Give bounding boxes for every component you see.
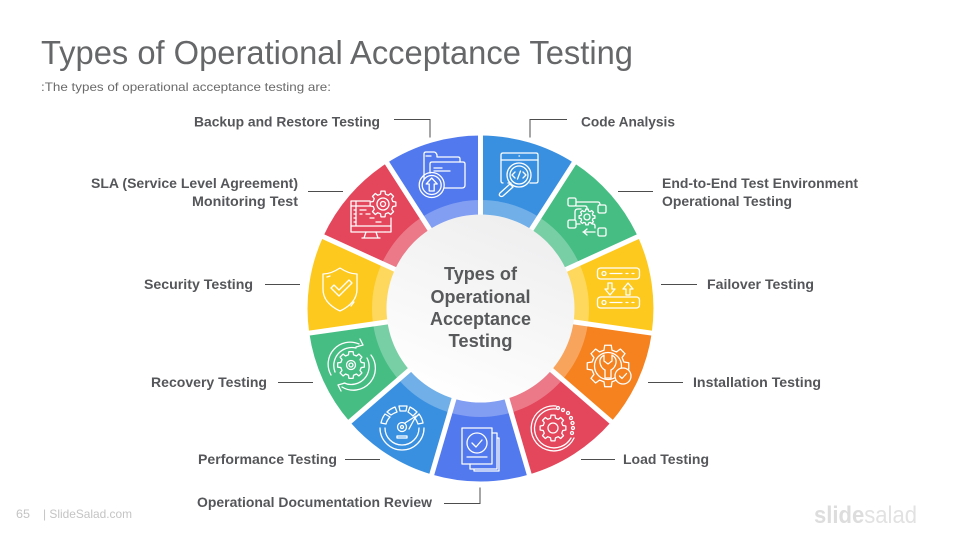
inner translucent ring	[372, 200, 589, 417]
icon: backup and restore	[419, 152, 465, 198]
label: load testing	[581, 451, 709, 467]
segment: end-to-end	[480, 163, 653, 359]
label: operational documentation review	[197, 488, 480, 510]
label: SLA monitoring test	[91, 175, 343, 209]
center disk	[386, 214, 574, 402]
label: security testing: Security Testing	[144, 276, 253, 292]
segment: failover	[480, 237, 677, 394]
page number: 65	[16, 507, 30, 521]
icon: end-to-end test environment	[568, 198, 606, 236]
segment: recovery	[289, 238, 480, 422]
donut chart	[289, 112, 677, 501]
segment: installation	[467, 308, 652, 426]
title: Types of Operational Acceptance Testing	[41, 34, 633, 71]
label: recovery testing: Recovery Testing	[151, 374, 267, 390]
icon: load	[531, 406, 574, 451]
label: backup and restore testing: Backup and Restore Testing	[194, 114, 380, 130]
label: installation testing: Installation Testing	[693, 374, 821, 390]
segment: load	[419, 308, 611, 492]
segment: performance	[342, 282, 480, 474]
center title: Types of	[444, 264, 518, 284]
label: SLA monitoring test: SLA (Service Level Agreement)	[91, 175, 298, 191]
icon: documentation review	[462, 428, 499, 471]
label: SLA monitoring test: Monitoring Test	[192, 193, 298, 209]
icon: security	[323, 268, 357, 311]
segment: documentation review	[391, 308, 529, 501]
label: operational documentation review: Operational Documentation Review	[197, 494, 432, 510]
label: end-to-end test environment: End-to-End Test Environment	[662, 175, 858, 191]
label: backup and restore testing	[194, 114, 430, 138]
icon: recovery	[328, 339, 375, 391]
segment: security	[296, 216, 480, 333]
center title: Acceptance	[430, 309, 531, 329]
icon: failover	[598, 268, 640, 308]
center title: Operational	[430, 287, 530, 307]
icon: installation	[587, 345, 631, 387]
label: end-to-end test environment	[618, 175, 858, 209]
icon: performance	[380, 406, 424, 450]
label: code analysis	[530, 114, 675, 138]
segment: backup and restore	[387, 112, 559, 308]
label: load testing: Load Testing	[623, 451, 709, 467]
logo: slidesalad	[814, 502, 917, 529]
icon: code analysis	[499, 153, 538, 196]
center title	[430, 264, 531, 351]
label: code analysis: Code Analysis	[581, 114, 675, 130]
center title: Testing	[448, 331, 512, 351]
segment: code analysis	[480, 136, 574, 308]
segment: SLA monitoring	[323, 152, 519, 308]
subtitle: :The types of operational acceptance testing are:	[41, 80, 331, 94]
footer brand text: | SlideSalad.com	[43, 507, 132, 521]
icon: SLA monitoring	[351, 191, 396, 238]
label: end-to-end test environment: Operational Testing	[662, 193, 792, 209]
label: performance testing: Performance Testing	[198, 451, 337, 467]
label: failover testing: Failover Testing	[707, 276, 814, 292]
